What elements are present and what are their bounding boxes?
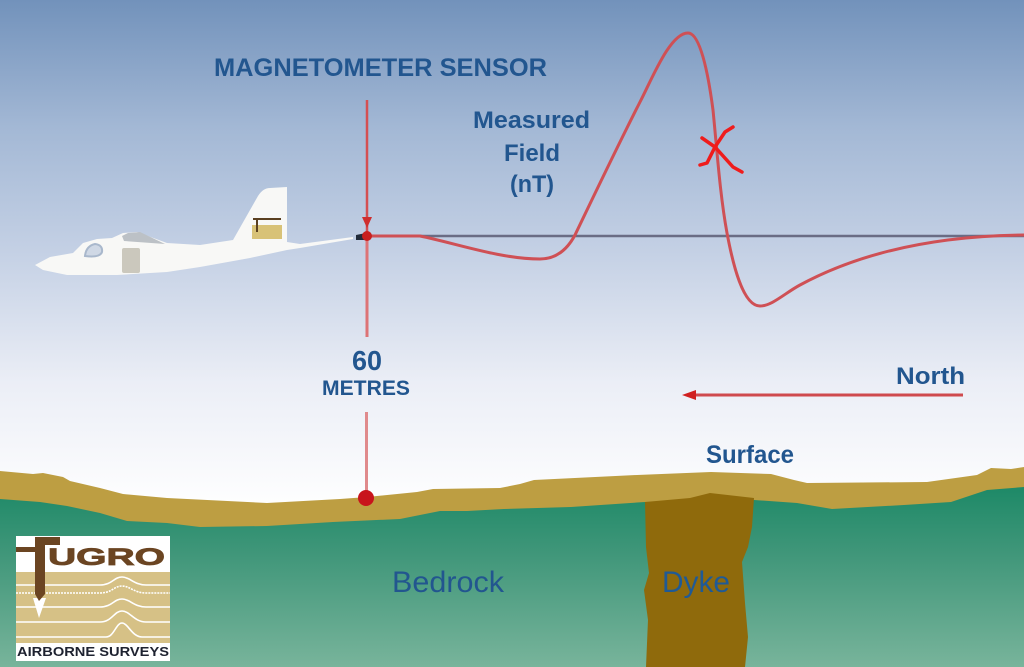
- heading: magnetometer sensor: MAGNETOMETER SENSOR: [214, 54, 547, 82]
- vertical line middle: [366, 236, 368, 337]
- aircraft canopy: [122, 232, 165, 244]
- logo wordmark: UGRO: [48, 544, 165, 571]
- tail logo mark: [253, 218, 281, 232]
- logo drill tip: [33, 598, 46, 618]
- north arrow: [682, 390, 963, 400]
- logo drill mark: [16, 537, 60, 601]
- label: 60 metres: METRES: [322, 377, 410, 400]
- label: measured field: Measured: [473, 107, 590, 134]
- logo tagline: AIRBORNE SURVEYS: [17, 644, 169, 659]
- label: bedrock: Bedrock: [392, 566, 505, 599]
- logo: Fugro Airborne Surveys: [16, 536, 170, 661]
- label: measured field: Field: [504, 140, 560, 167]
- aircraft body: [35, 187, 353, 275]
- aircraft window: [85, 244, 102, 256]
- label: dyke: Dyke: [662, 566, 730, 599]
- label: surface: Surface: [706, 441, 794, 469]
- tail logo: [252, 225, 282, 239]
- sensor arrowhead: [362, 217, 372, 228]
- dyke: [644, 493, 754, 667]
- vertical line lower: [365, 412, 368, 497]
- red hand-drawn X: [700, 127, 742, 172]
- measured field curve: [366, 33, 1024, 306]
- aircraft: [35, 187, 353, 275]
- label: measured field: (nT): [510, 171, 554, 198]
- surface soil layer: [0, 467, 1024, 527]
- baseline: [366, 235, 1024, 237]
- logo background: [16, 536, 170, 661]
- label: 60 metres: 60: [352, 345, 382, 376]
- label: 60 metres: [322, 345, 410, 400]
- label: measured field: [473, 107, 590, 198]
- vertical line upper: [366, 100, 368, 236]
- sensor tow bird: [356, 233, 366, 240]
- label: north: North: [896, 363, 965, 390]
- sensor dot: [362, 231, 372, 241]
- ground dot: [358, 490, 374, 506]
- aircraft pod: [122, 248, 140, 273]
- bedrock: [0, 477, 1024, 667]
- logo strata lines: [16, 577, 170, 637]
- sky background: [0, 0, 1024, 510]
- logo strata: [16, 572, 170, 643]
